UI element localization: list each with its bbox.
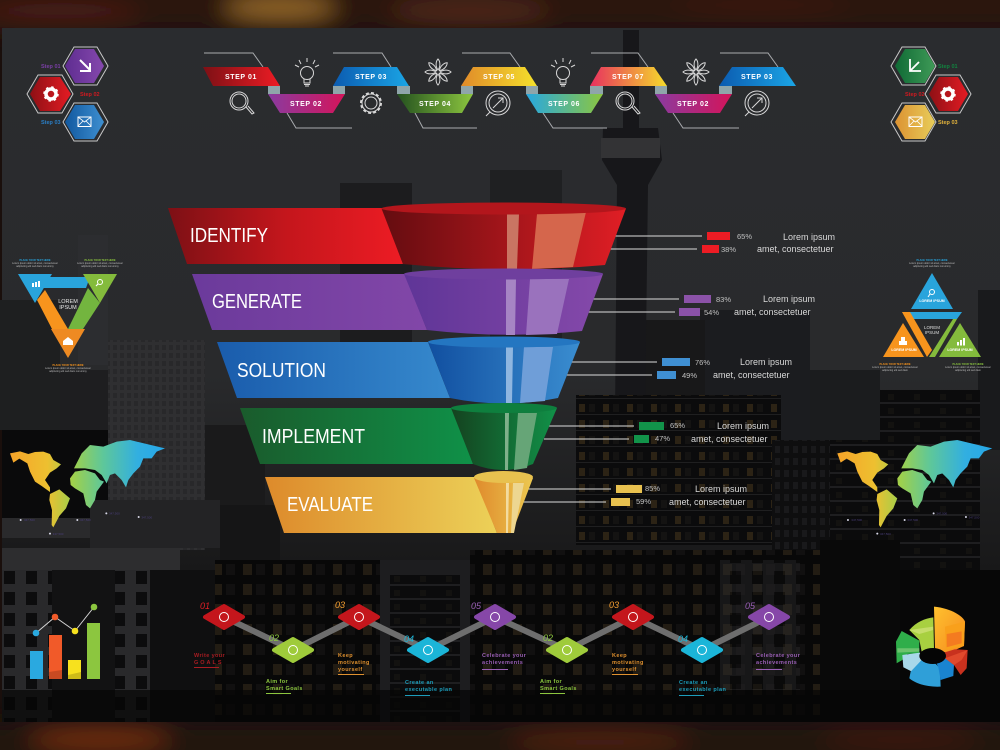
captions: Lorem ipsum dolor sit amet, consectetuer [872, 366, 918, 369]
icon: magnifier 2 [616, 92, 640, 114]
node 03 repeat: 03 [609, 600, 619, 610]
captions: Lorem ipsum dolor sit amet, consectetuer [77, 262, 123, 265]
node 05 repeat [745, 601, 801, 670]
icon: gear [361, 93, 381, 113]
metrics: evaluate [611, 484, 747, 507]
node 03: motivating [338, 660, 370, 666]
step 04: STEP 04 [419, 101, 451, 108]
node 04 repeat: executable plan [679, 687, 727, 693]
step 01 [203, 67, 280, 86]
green band [929, 319, 957, 357]
center label: IPSUM [925, 330, 939, 335]
captions: adipiscing elit sed diam nonummy [49, 370, 88, 373]
hexagon: yellow step 03: Step 03 [938, 120, 958, 126]
world map right: 347,500 [880, 532, 891, 536]
node 03 [335, 600, 378, 675]
green band [68, 288, 100, 329]
captions: PLACE YOUR TEXT HERE [84, 259, 116, 262]
step 06: STEP 06 [548, 101, 580, 108]
metrics: implement: Lorem ipsum [717, 421, 769, 431]
world map left: 347,500 [109, 512, 120, 516]
captions: adipiscing elit sed diam [955, 369, 981, 372]
icon: star burst 2 [683, 59, 709, 85]
hexagon: red step 02: Step 02 [905, 92, 925, 98]
metrics: identify: Lorem ipsum [783, 232, 835, 242]
orange band [902, 312, 932, 357]
blue triangle: LOREM IPSUM [919, 299, 945, 303]
node 04 repeat: Create an [679, 680, 708, 686]
captions: adipiscing elit sed diam nonummy [16, 265, 55, 268]
metrics: generate: amet, consectetuer [734, 307, 811, 317]
node 01 [194, 601, 243, 668]
node 02 repeat: 02 [543, 633, 553, 643]
tier: evaluate: EVALUATE [287, 494, 373, 516]
center label: IPSUM [59, 305, 77, 311]
hexagon steps right [891, 47, 971, 141]
captions: adipiscing elit sed diam nonummy [913, 265, 952, 268]
node 04 [404, 634, 453, 696]
node 03: Keep [338, 653, 353, 659]
node 01: 01 [200, 601, 210, 611]
center label: LOREM [58, 299, 78, 305]
leader lines [204, 53, 778, 128]
world map left [10, 440, 165, 536]
step 02 [268, 94, 345, 113]
hexagon steps left [27, 47, 108, 141]
captions [12, 259, 123, 373]
node 01: GOALS [194, 660, 224, 666]
tower [602, 30, 662, 420]
metrics: identify [702, 232, 835, 254]
green triangle: LOREM IPSUM [947, 348, 973, 352]
tier: solution [217, 336, 580, 404]
node 05 repeat: achievements [756, 660, 797, 666]
captions: PLACE YOUR TEXT HERE [19, 259, 51, 262]
lower city band [2, 548, 180, 570]
node 03 repeat [609, 600, 652, 675]
node 02: Aim for [266, 679, 288, 685]
metrics: generate [679, 294, 815, 317]
captions: PLACE YOUR TEXT HERE [916, 259, 948, 262]
orange band [37, 290, 68, 329]
funnel metrics [611, 232, 835, 507]
captions: PLACE YOUR TEXT HERE [952, 363, 984, 366]
connector tabs [268, 86, 732, 94]
step 07: STEP 07 [612, 74, 644, 81]
icon: light bulb [295, 58, 319, 86]
captions: PLACE YOUR TEXT HERE [52, 364, 84, 367]
step 06 [526, 94, 603, 113]
node 03 repeat: motivating [612, 660, 644, 666]
tier: implement [240, 403, 557, 470]
metrics: identify: 38% [721, 245, 736, 254]
captions: PLACE YOUR TEXT HERE [879, 363, 911, 366]
metrics: implement [634, 421, 769, 444]
icon: magnifier [230, 92, 254, 114]
node 02 repeat: Aim for [540, 679, 562, 685]
icon: target arrow [486, 91, 510, 116]
hexagon: purple step 01: Step 01 [41, 64, 61, 70]
node 05 [471, 601, 527, 670]
captions: Lorem ipsum dolor sit amet, consectetuer [909, 262, 955, 265]
tier: evaluate [265, 471, 533, 533]
captions: Lorem ipsum dolor sit amet, consectetuer [45, 367, 91, 370]
node 03 repeat: yourself [612, 667, 637, 673]
bar chart [30, 604, 100, 679]
tier: generate [192, 268, 603, 335]
world map right: 347,500 [969, 515, 980, 519]
world map left: 347,500 [24, 518, 35, 522]
metrics: implement: 65% [670, 421, 685, 430]
captions: Lorem ipsum dolor sit amet, consectetuer [12, 262, 58, 265]
icon: star burst [425, 59, 451, 85]
node 02 repeat: Smart Goals [540, 686, 577, 692]
node 02 repeat [540, 633, 586, 694]
node 05: 05 [471, 601, 482, 611]
node 04 repeat [678, 634, 727, 696]
node 04 repeat: 04 [678, 634, 688, 644]
tier: identify [168, 202, 626, 269]
node 04: executable plan [405, 687, 453, 693]
tier: generate: GENERATE [212, 291, 302, 313]
step 03: STEP 03 [355, 74, 387, 81]
node 03: 03 [335, 600, 345, 610]
tier: solution: SOLUTION [237, 360, 326, 382]
step ribbon [203, 53, 796, 128]
metrics: implement: amet, consectetuer [691, 434, 768, 444]
captions: adipiscing elit sed diam [882, 369, 908, 372]
metrics: evaluate: amet, consectetuer [669, 497, 746, 507]
world map right: 347,500 [851, 518, 862, 522]
step 02: STEP 02 [290, 101, 322, 108]
icon: target arrow 2 [745, 91, 769, 116]
3D donut chart [896, 607, 968, 687]
step 05 [461, 67, 537, 86]
metrics: generate: 83% [716, 295, 731, 304]
step 03 repeat [719, 67, 796, 86]
metrics: implement: 47% [655, 434, 670, 443]
step 02 repeat [655, 94, 732, 113]
world map right [837, 440, 992, 536]
node 03: yourself [338, 667, 363, 673]
metrics: evaluate: 85% [645, 484, 660, 493]
metrics: solution [657, 357, 792, 380]
node 05: Celebrate your [482, 653, 526, 659]
step 02 repeat: STEP 02 [677, 101, 709, 108]
orange triangle: LOREM IPSUM [891, 348, 917, 352]
metrics: generate: Lorem ipsum [763, 294, 815, 304]
connector path [224, 617, 769, 650]
triangle diagram right [872, 259, 991, 372]
blue band [902, 312, 962, 319]
node 02 [266, 633, 312, 694]
world map right: 347,500 [936, 512, 947, 516]
captions: adipiscing elit sed diam nonummy [81, 265, 120, 268]
metrics: identify: 65% [737, 232, 752, 241]
metrics: evaluate: Lorem ipsum [695, 484, 747, 494]
node 04: 04 [404, 634, 414, 644]
tier: identify: IDENTIFY [190, 225, 268, 247]
hexagon: blue step 03: Step 03 [41, 120, 61, 126]
node 05 repeat: 05 [745, 601, 756, 611]
step 03 repeat: STEP 03 [741, 74, 773, 81]
blue corner [18, 274, 52, 303]
node 05 repeat: Celebrate your [756, 653, 800, 659]
world map left: 347,500 [53, 532, 64, 536]
node 03 repeat: Keep [612, 653, 627, 659]
leader lines [522, 236, 702, 502]
world map left: 347,500 [80, 518, 91, 522]
icon: light bulb 2 [551, 58, 575, 86]
metrics: identify: amet, consectetuer [757, 244, 834, 254]
hexagon: green step 01: Step 01 [938, 64, 958, 70]
step 04 [397, 94, 473, 113]
world map left: 347,500 [141, 515, 152, 519]
green corner [83, 274, 117, 303]
step 01: STEP 01 [225, 74, 257, 81]
node 04: Create an [405, 680, 434, 686]
triangle diagram left [12, 259, 123, 373]
captions [872, 259, 991, 372]
node 01: Write your [194, 653, 225, 659]
node 02: 02 [269, 633, 279, 643]
node 02: Smart Goals [266, 686, 303, 692]
world map right: 347,500 [907, 518, 918, 522]
step 05: STEP 05 [483, 74, 515, 81]
step 03 [333, 67, 409, 86]
metrics: evaluate: 59% [636, 497, 651, 506]
hexagon: red step 02: Step 02 [80, 92, 100, 98]
captions: Lorem ipsum dolor sit amet, consectetuer [945, 366, 991, 369]
metrics: solution: Lorem ipsum [740, 357, 792, 367]
tier: implement: IMPLEMENT [262, 426, 365, 448]
orange corner [51, 329, 85, 358]
metrics: generate: 54% [704, 308, 719, 317]
metrics: solution: 49% [682, 371, 697, 380]
step 07 [590, 67, 667, 86]
node 05: achievements [482, 660, 523, 666]
metrics: solution: 76% [695, 358, 710, 367]
center label: LOREM [924, 325, 940, 330]
funnel [168, 202, 702, 533]
blue band [43, 277, 90, 288]
zigzag timeline [194, 600, 801, 696]
metrics: solution: amet, consectetuer [713, 370, 790, 380]
